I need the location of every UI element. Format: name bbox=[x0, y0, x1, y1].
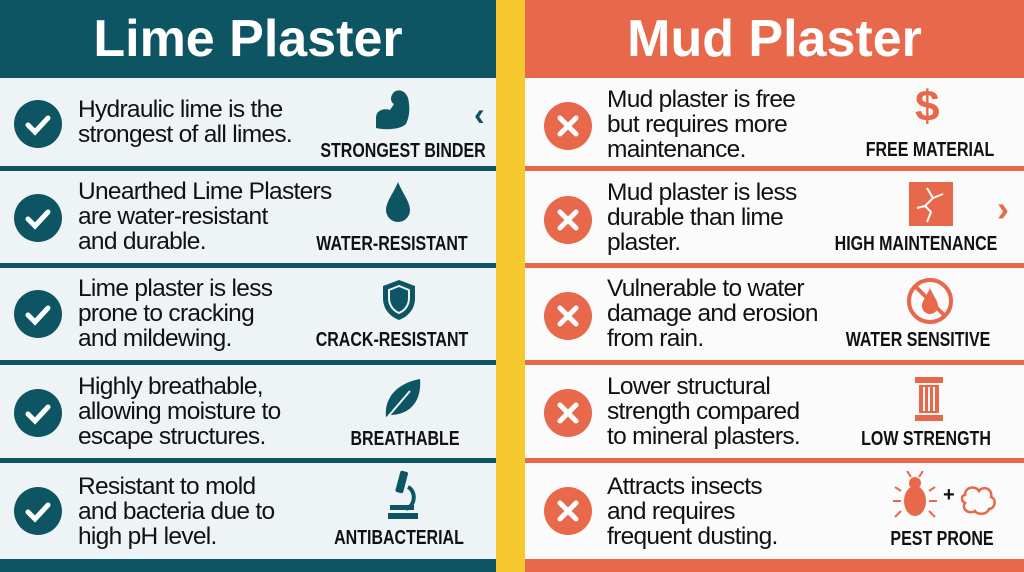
icon: check bbox=[14, 487, 62, 535]
text: prone to cracking bbox=[78, 300, 254, 327]
text bbox=[78, 373, 281, 450]
icon: cross bbox=[544, 102, 592, 150]
icon: microscope bbox=[388, 470, 418, 519]
panel: mud plaster bbox=[525, 0, 1024, 572]
text: Vulnerable to water bbox=[607, 275, 804, 302]
text: from rain. bbox=[607, 325, 703, 352]
icon: bug plus dust: + bbox=[943, 484, 955, 506]
arrow: ‹ bbox=[474, 96, 485, 132]
row 2 bbox=[544, 179, 1009, 256]
text: Mud plaster is free bbox=[607, 86, 795, 113]
text: durable than lime bbox=[607, 204, 783, 231]
icon: broken pillar bbox=[915, 377, 943, 421]
row 4 bbox=[544, 373, 991, 450]
text: and requires bbox=[607, 498, 735, 525]
text: and mildewing. bbox=[78, 325, 232, 352]
label: PEST PRONE bbox=[890, 528, 994, 550]
text bbox=[78, 473, 274, 550]
heading: Lime Plaster bbox=[0, 0, 496, 78]
icon: no water bbox=[907, 278, 953, 324]
label: LOW STRENGTH bbox=[861, 428, 991, 450]
icon: bug plus dust bbox=[893, 471, 996, 518]
heading: Lime Plaster: Lime Plaster bbox=[93, 10, 403, 68]
text: and bacteria due to bbox=[78, 498, 274, 525]
icon: cross bbox=[544, 292, 592, 340]
text: frequent dusting. bbox=[607, 523, 778, 550]
row 5 bbox=[14, 470, 464, 550]
text bbox=[607, 86, 795, 163]
label: CRACK-RESISTANT bbox=[316, 329, 468, 351]
text: plaster. bbox=[607, 229, 680, 256]
text: Attracts insects bbox=[607, 473, 762, 500]
row 3 bbox=[544, 275, 990, 352]
text bbox=[607, 179, 797, 256]
text: maintenance. bbox=[607, 136, 746, 163]
text: Lower structural bbox=[607, 373, 770, 400]
arrow: › bbox=[997, 188, 1009, 229]
icon: cross bbox=[544, 389, 592, 437]
row 4 bbox=[14, 373, 460, 450]
text bbox=[607, 473, 778, 550]
row 2 bbox=[14, 178, 468, 255]
icon: check bbox=[14, 194, 62, 242]
icon: check bbox=[14, 100, 62, 148]
text bbox=[78, 178, 332, 255]
icon: shield bbox=[383, 280, 415, 320]
text: Mud plaster is less bbox=[607, 179, 797, 206]
icon: drop bbox=[386, 182, 410, 222]
heading: Mud Plaster bbox=[525, 0, 1024, 78]
icon: cross bbox=[544, 196, 592, 244]
text: Lime plaster is less bbox=[78, 275, 272, 302]
text: Resistant to mold bbox=[78, 473, 255, 500]
text: Unearthed Lime Plasters bbox=[78, 178, 332, 205]
icon: check bbox=[14, 389, 62, 437]
row 5 bbox=[544, 471, 996, 550]
text: and durable. bbox=[78, 228, 206, 255]
text: high pH level. bbox=[78, 523, 217, 550]
label: FREE MATERIAL bbox=[866, 139, 994, 161]
text bbox=[78, 275, 272, 352]
text: Highly breathable, bbox=[78, 373, 263, 400]
icon: arm bbox=[376, 90, 410, 130]
text bbox=[607, 275, 818, 352]
divider: yellow bbox=[496, 0, 525, 572]
text: strongest of all limes. bbox=[78, 121, 292, 148]
icon: check bbox=[14, 290, 62, 338]
text: escape structures. bbox=[78, 423, 266, 450]
row 1 bbox=[544, 82, 994, 163]
text: damage and erosion bbox=[607, 300, 818, 327]
label: WATER-RESISTANT bbox=[316, 233, 468, 255]
icon: cross bbox=[544, 487, 592, 535]
row 1 bbox=[14, 90, 486, 162]
text: strength compared bbox=[607, 398, 799, 425]
label: STRONGEST BINDER bbox=[320, 140, 486, 162]
text bbox=[607, 373, 800, 450]
label: BREATHABLE bbox=[350, 428, 460, 450]
text bbox=[78, 96, 292, 148]
text: Hydraulic lime is the bbox=[78, 96, 283, 123]
text: but requires more bbox=[607, 111, 787, 138]
text: are water-resistant bbox=[78, 203, 268, 230]
text: allowing moisture to bbox=[78, 398, 281, 425]
icon: cracked wall bbox=[909, 182, 953, 226]
label: HIGH MAINTENANCE bbox=[835, 233, 997, 255]
heading: Mud Plaster: Mud Plaster bbox=[627, 10, 922, 68]
label: ANTIBACTERIAL bbox=[334, 527, 464, 549]
row 3 bbox=[14, 275, 468, 352]
icon: leaf bbox=[386, 379, 420, 417]
text: to mineral plasters. bbox=[607, 423, 800, 450]
icon: dollar: $ bbox=[915, 82, 939, 131]
label: WATER SENSITIVE bbox=[846, 329, 990, 351]
panel: lime plaster bbox=[0, 0, 496, 572]
